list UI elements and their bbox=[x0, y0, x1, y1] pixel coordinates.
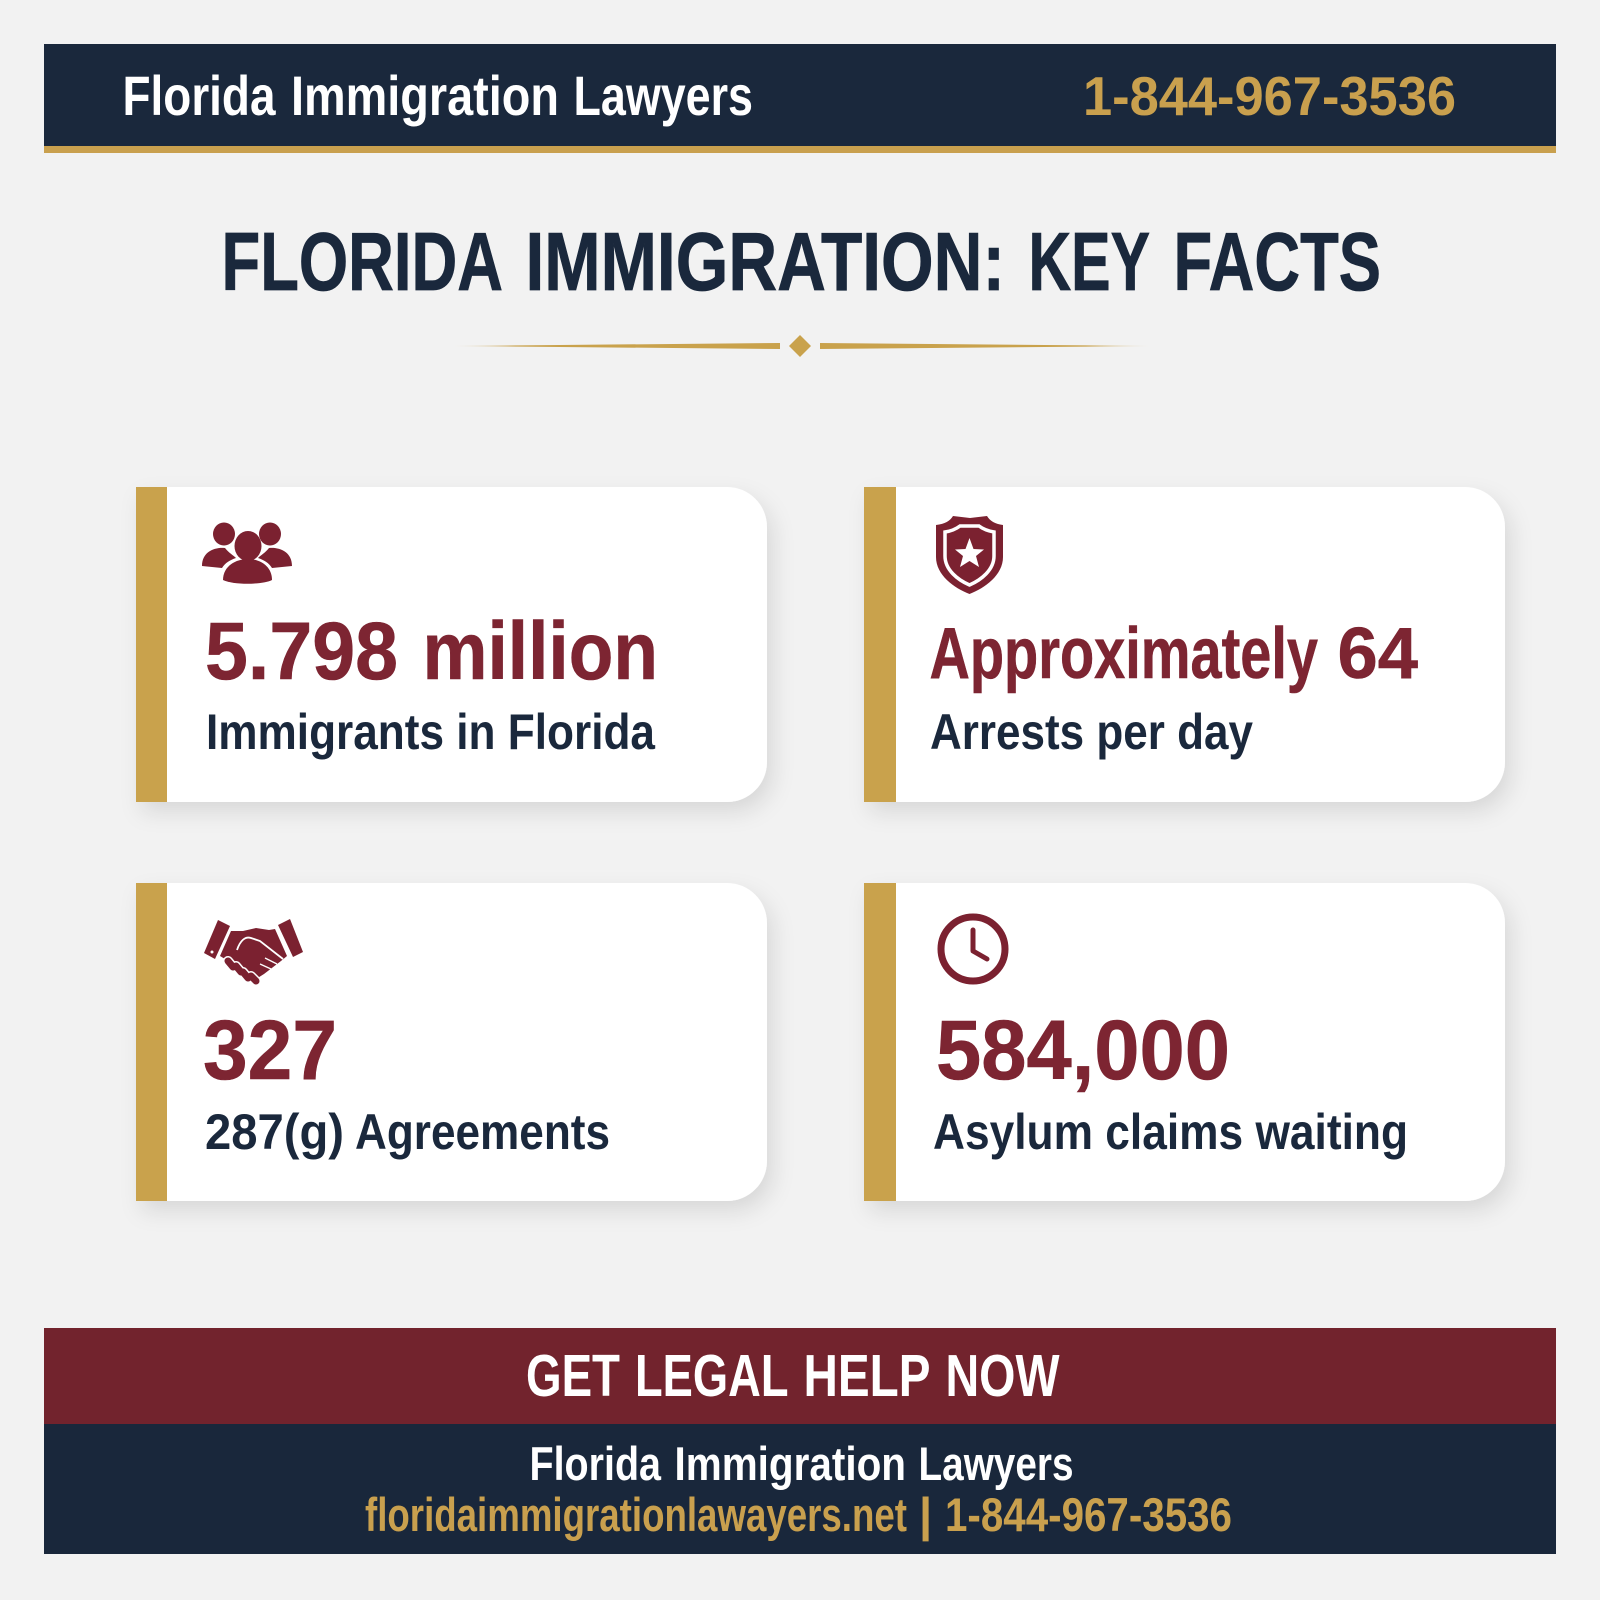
stat label: Agreements bbox=[355, 1104, 610, 1160]
title bbox=[222, 215, 1381, 308]
call-to-action heading: LEGAL bbox=[635, 1343, 788, 1409]
footer firm name: Immigration bbox=[674, 1437, 906, 1490]
stat value: 5.798 bbox=[205, 606, 398, 697]
icon: handshake bbox=[204, 919, 303, 981]
footer firm name: Florida bbox=[530, 1437, 662, 1490]
title: IMMIGRATION: bbox=[526, 215, 1005, 308]
stat value: 584,000 bbox=[936, 1003, 1230, 1097]
title: KEY bbox=[1028, 215, 1150, 308]
title: FACTS bbox=[1174, 215, 1381, 308]
call-to-action heading: HELP bbox=[804, 1343, 930, 1409]
footer firm name bbox=[530, 1437, 1074, 1490]
footer firm name: Lawyers bbox=[918, 1437, 1074, 1490]
stat label: 287(g) bbox=[205, 1104, 344, 1160]
panel: arrests per day bbox=[864, 487, 1505, 802]
icon: clock bbox=[941, 917, 1005, 981]
stat label: Arrests per day bbox=[930, 704, 1253, 760]
stat value: 327 bbox=[203, 1003, 337, 1097]
call-to-action heading bbox=[526, 1343, 1060, 1409]
icon: people bbox=[202, 522, 292, 584]
header phone number: 1-844-967-3536 bbox=[1083, 65, 1456, 127]
header firm name: Immigration bbox=[291, 64, 559, 127]
stat label: Immigrants in Florida bbox=[206, 704, 656, 760]
title divider bbox=[449, 335, 1152, 357]
panel: immigrants in Florida bbox=[136, 487, 767, 802]
panel: 287(g) agreements bbox=[136, 883, 767, 1201]
header firm name bbox=[122, 64, 753, 127]
title: FLORIDA bbox=[222, 215, 503, 308]
header firm name: Lawyers bbox=[574, 64, 753, 127]
panel: asylum claims waiting bbox=[864, 883, 1505, 1201]
icon: shield with star bbox=[936, 516, 1003, 594]
call-to-action heading: GET bbox=[526, 1343, 620, 1409]
header bar bbox=[44, 44, 1556, 153]
stat value: Approximately bbox=[930, 614, 1318, 694]
call-to-action heading: NOW bbox=[946, 1343, 1060, 1409]
footer contact block bbox=[44, 1424, 1556, 1554]
stat value: 64 bbox=[1338, 614, 1418, 694]
footer website and phone: 1-844-967-3536 bbox=[945, 1488, 1232, 1541]
stat value bbox=[205, 606, 658, 697]
stat label bbox=[205, 1104, 610, 1160]
stat label: Asylum claims waiting bbox=[933, 1104, 1408, 1160]
stat value: million bbox=[422, 606, 658, 697]
footer website and phone: floridaimmigrationlawayers.net bbox=[365, 1488, 907, 1541]
header firm name: Florida bbox=[122, 64, 276, 127]
call-to-action banner bbox=[44, 1328, 1556, 1424]
footer website and phone: | bbox=[919, 1488, 932, 1541]
